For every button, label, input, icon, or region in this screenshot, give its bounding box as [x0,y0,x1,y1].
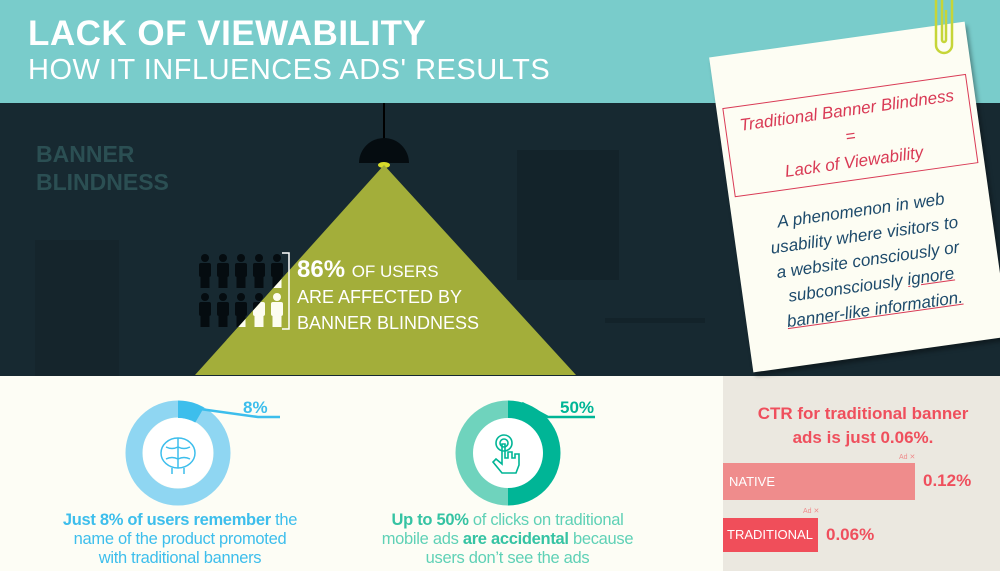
description: banner-like information. [786,288,964,331]
bar: traditional: 0.06% [826,525,874,544]
stat text 86%: 86% OF USERS [297,256,439,283]
light cone [195,165,576,375]
donut 2: 50% [456,398,595,506]
stat text 86% [297,256,479,333]
description: a website consciously or [775,238,960,282]
icon: brain [161,438,195,474]
text: 8% remember: with traditional banners [99,549,261,567]
heading: banner blindness: BANNER [36,141,135,167]
icon: hand tap [493,435,519,473]
boxed definition: Lack of Viewability [784,143,924,181]
title: LACK OF VIEWABILITY [28,14,426,53]
text: 50% accidental: mobile ads are accidental because [382,530,633,548]
CTR panel [723,376,1000,571]
bar: traditional: TRADITIONAL [727,527,813,542]
desk [605,318,705,323]
CTR heading: CTR for traditional banner [758,404,968,423]
stat text 86%: BANNER BLINDNESS [297,313,479,333]
description: subconsciously ignore [787,264,955,306]
CTR heading: ads is just 0.06%. [793,428,933,447]
bar: native: 0.12% [923,471,971,490]
text: 50% accidental: users don’t see the ads [426,549,589,567]
boxed definition [722,74,978,197]
description: usability where visitors to [769,213,959,258]
bar: native: NATIVE [729,474,775,489]
title [28,14,550,86]
donut 1: 8% [126,398,280,506]
window [517,150,619,280]
header band [0,0,1000,103]
stat text 86%: ARE AFFECTED BY [297,287,462,307]
text: 8% remember [63,511,297,567]
people icons [199,254,283,327]
lamp [359,103,409,168]
description [769,189,964,331]
text: 50% accidental [382,511,633,567]
donut 2: 50%: 50% [560,398,594,417]
donut 1: 8%: 8% [243,398,268,417]
boxed definition: Traditional Banner Blindness [739,86,955,135]
title: HOW IT INFLUENCES ADS' RESULTS [28,54,550,86]
text: Ad ✕ [899,454,915,461]
bar: traditional [723,508,874,552]
heading: banner blindness: BLINDNESS [36,169,169,195]
text: Ad ✕ [803,508,819,515]
text: 50% accidental: Up to 50% of clicks on traditional [392,511,623,529]
text: 8% remember: Just 8% of users remember the [63,511,297,529]
CTR heading [758,404,968,447]
text: 8% remember: name of the product promoted [74,530,286,548]
note paper [709,22,1000,372]
bar: native [723,454,971,500]
boxed definition: = [844,126,857,146]
door [35,240,119,376]
paperclip [934,0,954,54]
heading: banner blindness [36,141,169,195]
description: A phenomenon in web [776,189,946,232]
dark room scene [0,103,1000,376]
